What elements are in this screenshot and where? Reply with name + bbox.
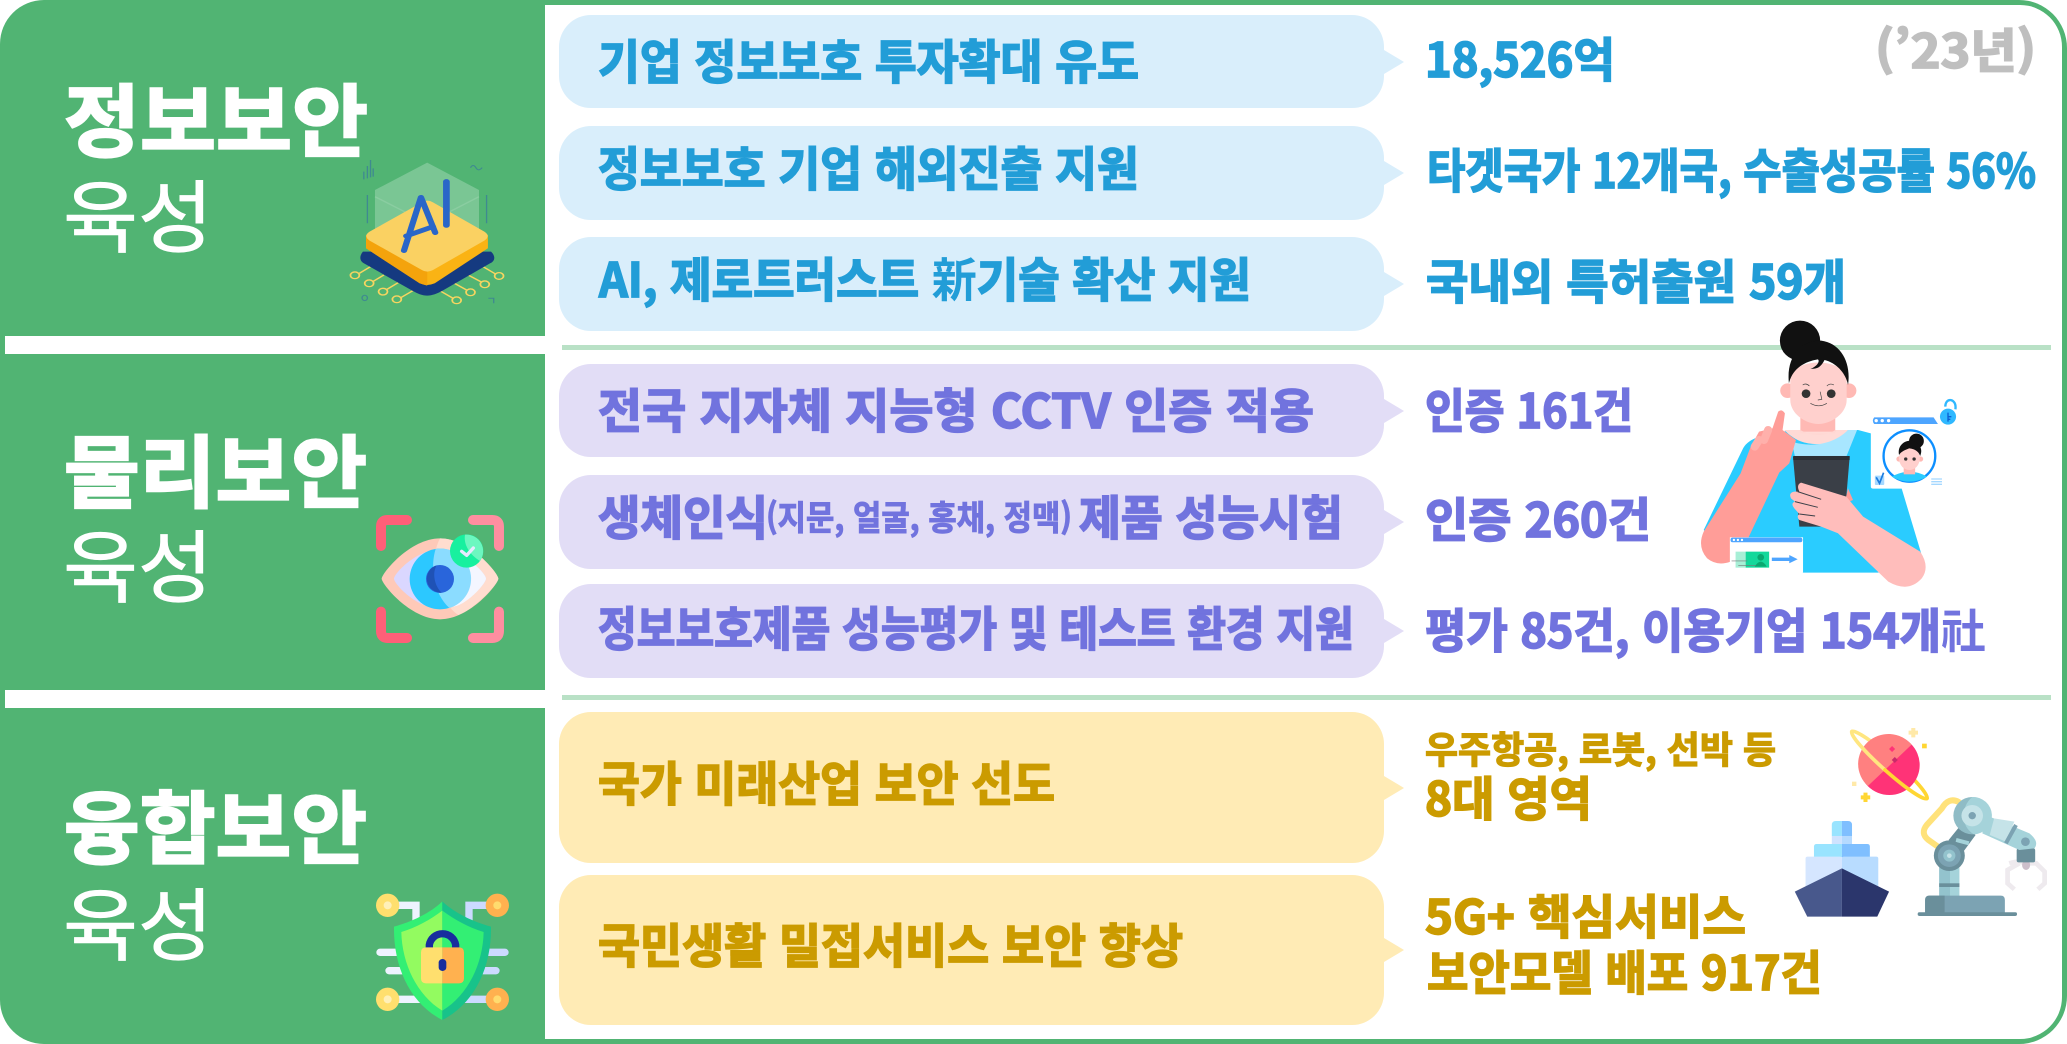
row: 생체인식 제품 성능시험: 제품 성능시험: [1079, 480, 1343, 549]
subheading: 육성: 육성: [63, 154, 213, 269]
heading: 정보보안: 정보보안: [64, 58, 368, 173]
row: 국가 미래산업 보안 선도: 국가 미래산업 보안 선도: [598, 746, 1055, 815]
row: 정보보호 기업 해외진출 지원: [559, 126, 1404, 220]
panel: 융합보안 rows: [559, 712, 1822, 1025]
row: 정보보호제품 성능평가 및 테스트 환경 지원: [559, 584, 1404, 678]
row: 국민생활 밀접서비스 보안 향상: 국민생활 밀접서비스 보안 향상: [598, 908, 1183, 977]
icon: AI chip: [350, 160, 504, 304]
panel: 물리보안 rows: [559, 364, 1986, 678]
row: 전국 지자체 지능형 CCTV 인증 적용: 전국 지자체 지능형 CCTV 인증 적용: [598, 373, 1314, 442]
heading: 물리보안: 물리보안: [64, 409, 367, 524]
metric: 인증 260건: 인증 260건: [1425, 482, 1651, 551]
panel: 융합보안 육성: [63, 765, 509, 1020]
metric: 5G+ 핵심서비스 보안모델 배포 917건: 보안모델 배포 917건: [1427, 935, 1822, 1004]
row: 정보보호제품 성능평가 및 테스트 환경 지원: 정보보호제품 성능평가 및 테스트 환경 지원: [598, 591, 1354, 660]
illustration: robot arm: [1918, 797, 2045, 916]
note: 연도: (’23년): [1875, 13, 2036, 82]
metric: 평가 85건 이용기업 154개社: 평가 85건, 이용기업 154개社: [1425, 593, 1986, 662]
heading: 융합보안: 융합보안: [64, 765, 367, 880]
metric: 인증 161건: 인증 161건: [1425, 373, 1633, 442]
row: 기업 정보보호 투자확대 유도: [559, 15, 1404, 108]
row: 전국 지자체 지능형 CCTV 인증 적용: [559, 364, 1404, 457]
icon: shield lock: [376, 894, 509, 1020]
row: 생체인식 제품 성능시험: (지문, 얼굴, 홍채, 정맥): [766, 491, 1072, 540]
row: AI, 제로트러스트 新기술 확산 지원: AI, 제로트러스트 新기술 확산 지원: [598, 242, 1251, 311]
row: AI, 제로트러스트 新기술 확산 지원: [559, 237, 1404, 331]
row: 국민생활 밀접서비스 보안 향상: [559, 875, 1404, 1025]
subheading: 육성: 육성: [63, 862, 213, 977]
illustration: woman with phone and biometric login: [1701, 321, 1956, 587]
row: 국가 미래산업 보안 선도: [559, 712, 1404, 863]
panel: 정보보안 rows: [559, 13, 2036, 331]
metric: 우주항공 8대 영역: 우주항공, 로봇, 선박 등: [1425, 720, 1776, 774]
panel: 물리보안 육성: [63, 409, 499, 638]
metric: 18,526억: 18,526억: [1425, 22, 1615, 91]
metric: 우주항공 8대 영역: 8대 영역: [1425, 761, 1592, 830]
row: 기업 정보보호 투자확대 유도: 기업 정보보호 투자확대 유도: [598, 24, 1139, 93]
row: 정보보호 기업 해외진출 지원: 정보보호 기업 해외진출 지원: [598, 131, 1139, 200]
metric: 5G+ 핵심서비스 보안모델 배포 917건: 5G+ 핵심서비스: [1425, 879, 1746, 948]
row: 생체인식 제품 성능시험: [559, 475, 1404, 569]
metric: 우주항공 8대 영역: [1425, 720, 1776, 830]
subheading: 육성: 육성: [63, 504, 213, 619]
icon: eye scan: [381, 520, 499, 638]
metric: 5G+ 핵심서비스 보안모델 배포 917건: [1425, 879, 1822, 1004]
illustration: ship: [1795, 821, 1889, 917]
row: 생체인식 제품 성능시험: 생체인식: [598, 480, 768, 549]
illustration: planet: [1852, 728, 1927, 802]
panel: 정보보안 육성: [63, 58, 504, 304]
metric: 국내외 특허출원 59개: 국내외 특허출원 59개: [1426, 244, 1846, 313]
